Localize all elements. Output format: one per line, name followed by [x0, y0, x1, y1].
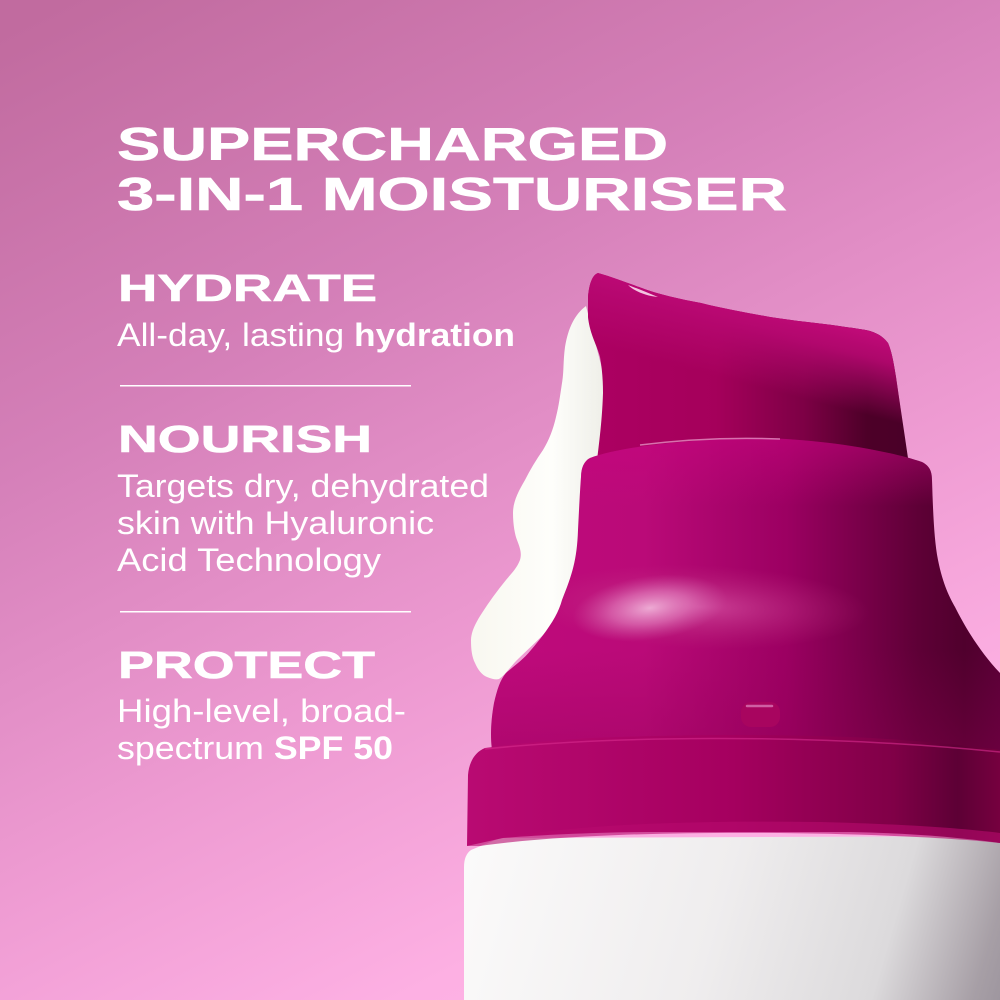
- section: nourish: [117, 419, 489, 578]
- cap upper glow: [580, 438, 932, 496]
- text: nourish description: skin with Hyaluronic: [117, 505, 434, 541]
- title: [117, 118, 787, 220]
- section: protect: [117, 645, 406, 766]
- collar top edge: [485, 738, 1000, 752]
- title: SUPERCHARGED: [117, 118, 668, 170]
- product: moisturiser bottle: [464, 265, 1000, 1000]
- text: protect description: spectrum SPF 50: [117, 730, 393, 766]
- rim highlight: [640, 438, 780, 445]
- text: protect description: High-level, broad-: [117, 693, 406, 729]
- lower shading: [491, 692, 1000, 750]
- collar: [467, 735, 1000, 846]
- small notch: [741, 702, 780, 727]
- heading: hydrate: HYDRATE: [118, 268, 377, 310]
- cream: [471, 306, 610, 679]
- nozzle top surface: [588, 273, 902, 419]
- text: nourish description: Targets dry, dehydrated: [117, 468, 489, 504]
- text: protect description: [117, 693, 406, 766]
- heading: nourish: NOURISH: [118, 419, 372, 461]
- heading: protect: PROTECT: [118, 645, 375, 687]
- shoulder cap: [491, 438, 1000, 750]
- title: 3-IN-1 MOISTURISER: [117, 168, 787, 220]
- bottle body: [464, 836, 1000, 1000]
- collar lower lip: [467, 822, 1000, 846]
- shoulder sheen: [572, 574, 840, 640]
- nozzle highlight: [628, 285, 658, 297]
- text: nourish description: [117, 468, 489, 578]
- pump nozzle: [588, 273, 908, 458]
- section: hydrate: [117, 268, 515, 353]
- sheen core: [580, 578, 718, 638]
- text: nourish description: Acid Technology: [117, 542, 381, 578]
- text: hydrate description: All-day, lasting hydration: [117, 317, 515, 353]
